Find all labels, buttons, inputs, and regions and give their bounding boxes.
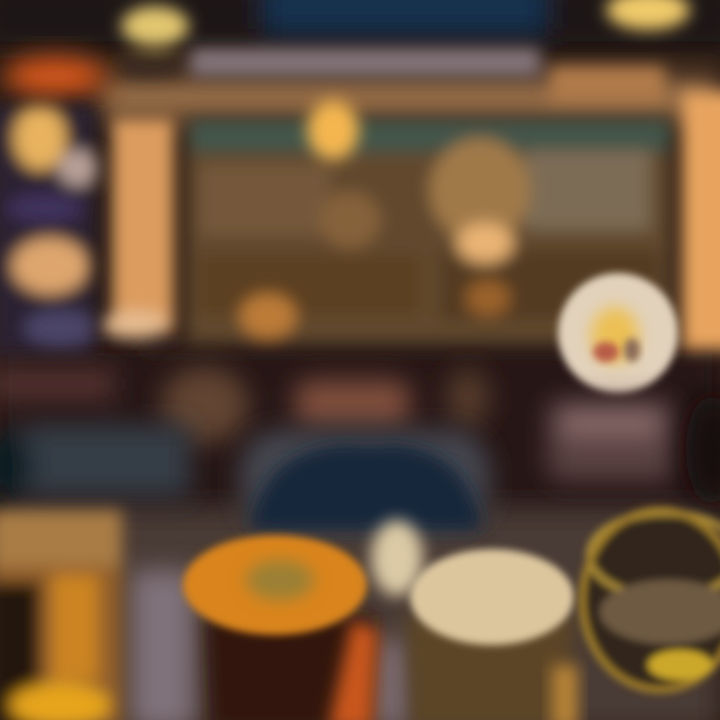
round emblem bbox=[558, 273, 678, 393]
top left orange light bbox=[3, 56, 107, 96]
seated figure in navy bbox=[240, 430, 490, 530]
ceiling lamps bbox=[114, 0, 690, 76]
hanging lamp bbox=[307, 100, 359, 160]
dark right edge figure bbox=[686, 395, 720, 505]
left blue-grey counter bbox=[0, 368, 190, 499]
gold ringed glass bbox=[582, 510, 720, 690]
right pillar bbox=[682, 92, 720, 350]
orange cup bbox=[183, 535, 378, 720]
white cup bbox=[371, 520, 578, 720]
left pillar bbox=[101, 118, 174, 339]
shelves panel bbox=[140, 118, 680, 352]
left wall decorations bbox=[0, 105, 98, 355]
banner sign bbox=[190, 48, 665, 102]
table surface bbox=[130, 570, 412, 720]
back booths bbox=[161, 367, 673, 480]
left glass cup bbox=[0, 510, 122, 720]
